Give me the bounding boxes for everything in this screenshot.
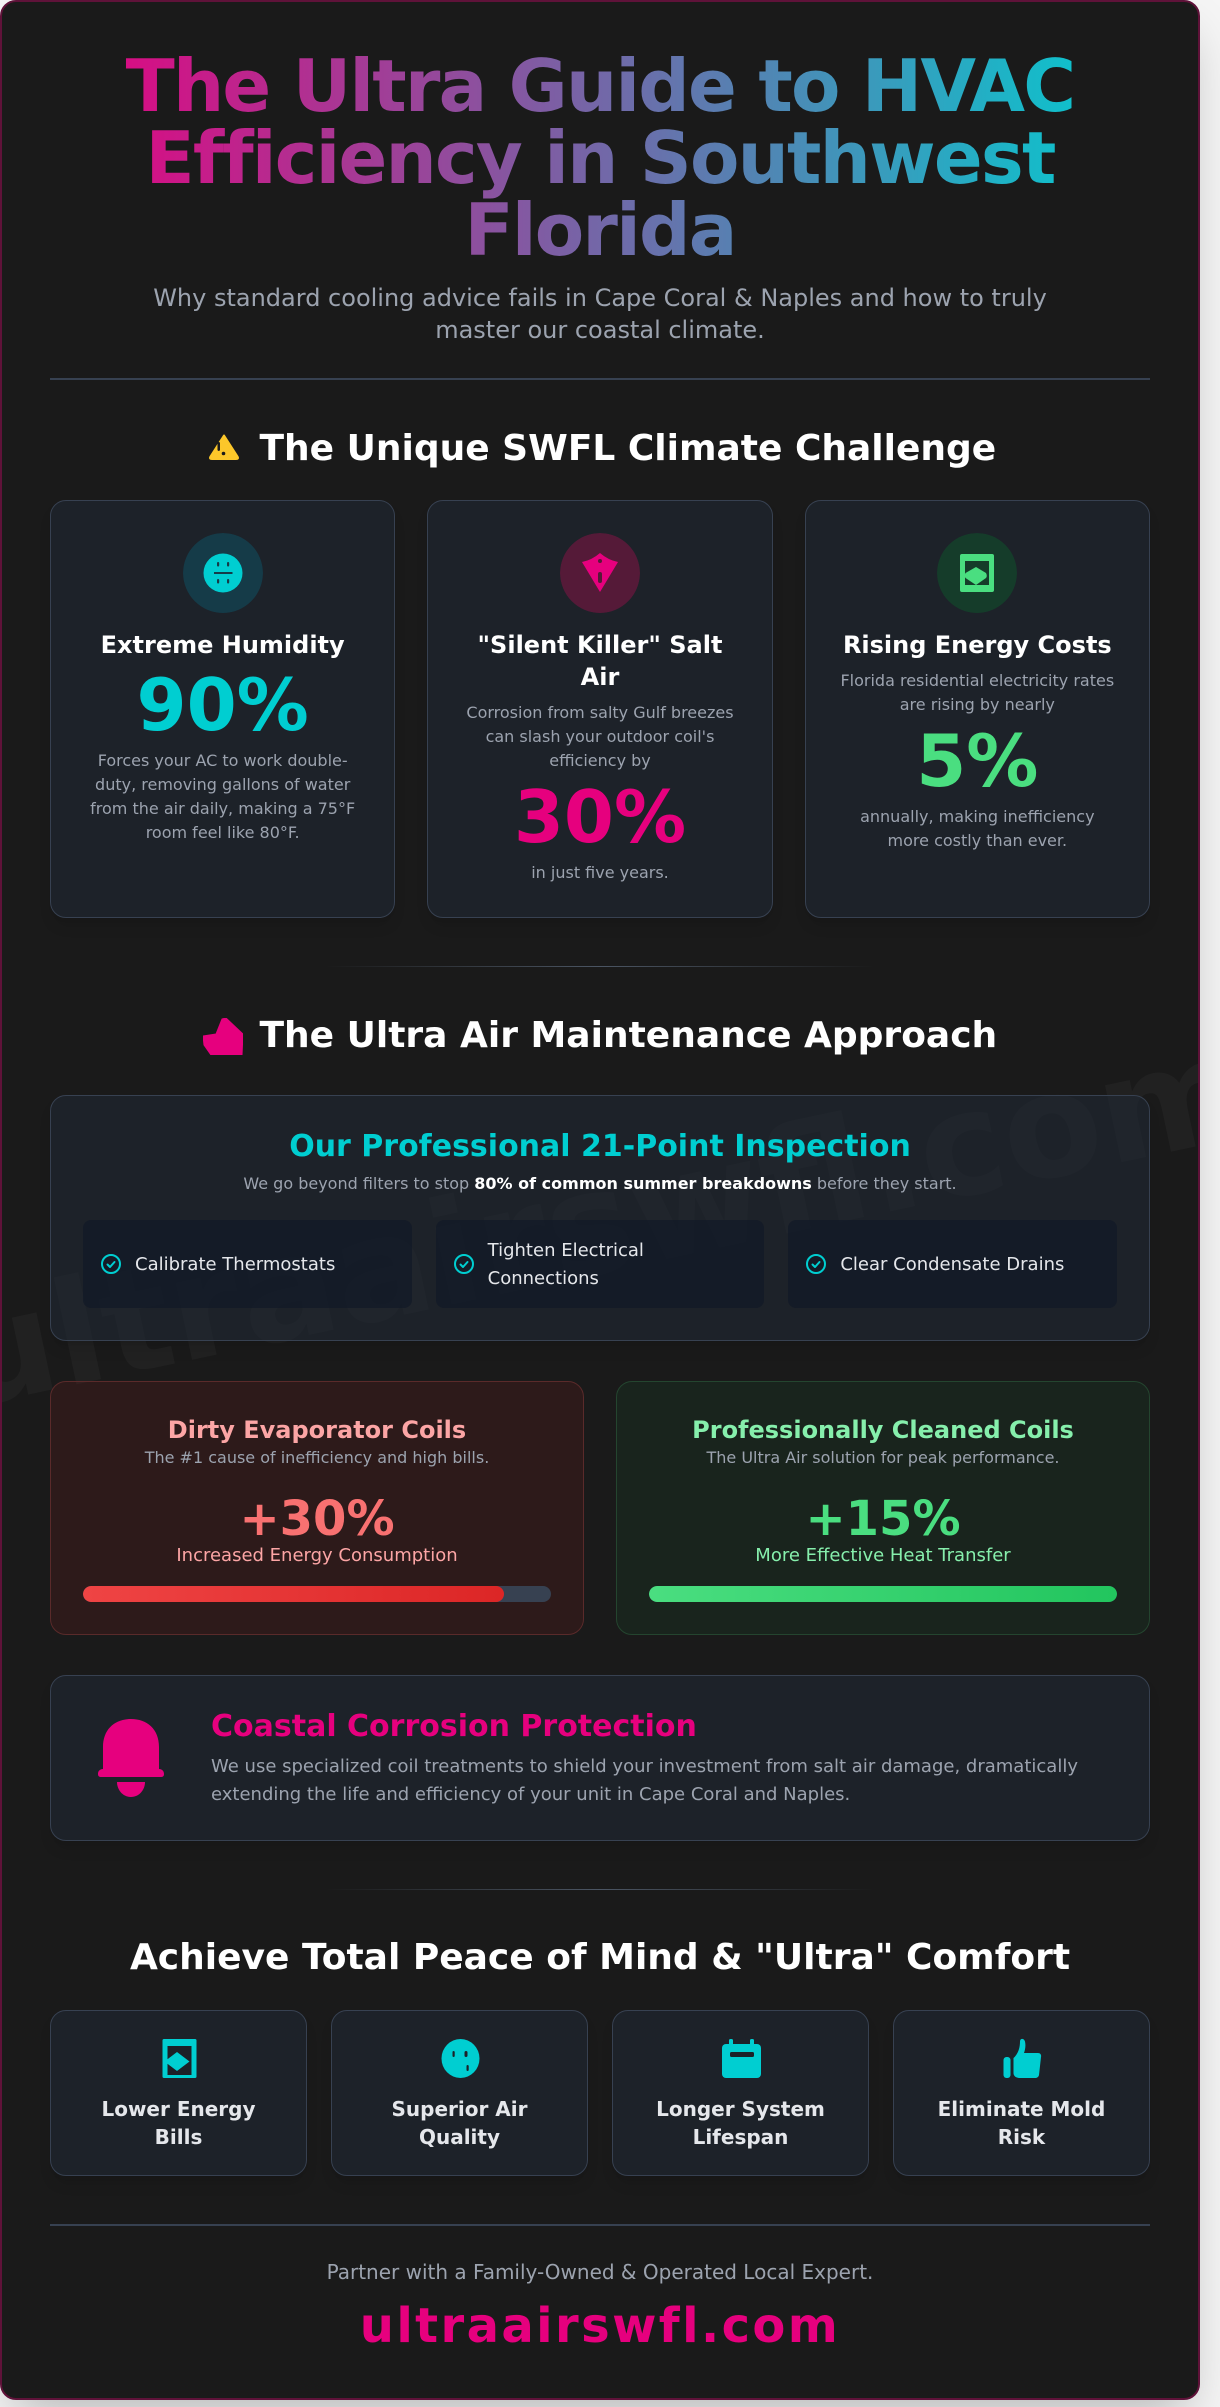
stat: 30%: 30% [514, 775, 686, 859]
text block [211, 1709, 1078, 1805]
label: Longer System Lifespan [656, 2097, 825, 2149]
description: The Ultra Air solution for peak performance. [706, 1448, 1060, 1467]
icon: bell [98, 1719, 164, 1797]
checklist [83, 1220, 1117, 1308]
footer url: ultraairswfl.com [360, 2298, 840, 2354]
stat: +30% [239, 1491, 395, 1547]
description end: in just five years. [531, 863, 669, 882]
item: drains [788, 1220, 1117, 1308]
heading: peace of mind: Achieve Total Peace of Mind & "Ultra" Comfort [130, 1937, 1070, 1978]
description: The #1 cause of inefficiency and high bills. [145, 1448, 489, 1467]
heading: Our Professional 21-Point Inspection [289, 1129, 911, 1164]
progress bar: 90% [83, 1586, 551, 1602]
subtitle [153, 284, 1047, 344]
item: electrical: Tighten Electrical Connections [488, 1240, 644, 1289]
panel: air quality [331, 2010, 588, 2176]
heading: Coastal Corrosion Protection [211, 1709, 697, 1744]
panel: mold risk [893, 2010, 1150, 2176]
icon: calendar [722, 2039, 761, 2078]
label: Superior Air Quality [391, 2097, 528, 2149]
panel: extreme humidity [50, 500, 395, 918]
item: drains: Clear Condensate Drains [840, 1254, 1064, 1275]
subtitle: master our coastal climate. [435, 316, 765, 344]
subtitle: Why standard cooling advice fails in Cape Coral & Naples and how to truly [153, 284, 1047, 312]
icon: face [442, 2039, 480, 2078]
panel: energy costs [805, 500, 1150, 918]
description: Florida residential electricity rates are rising by nearly [840, 671, 1114, 714]
heading: Extreme Humidity [101, 631, 345, 659]
label: Eliminate Mold Risk [938, 2097, 1105, 2149]
icon: thumbs up [1004, 2038, 1042, 2078]
heading: "Silent Killer" Salt Air [478, 631, 722, 691]
stat: +15% [805, 1491, 961, 1547]
item: thermostats [83, 1220, 412, 1308]
description: We go beyond filters to stop 80% of common summer breakdowns before they start. [243, 1174, 957, 1193]
icon: shield [560, 533, 640, 613]
item: thermostats: Calibrate Thermostats [135, 1254, 335, 1275]
label: Lower Energy Bills [101, 2097, 256, 2149]
icon: thumbs up [203, 1018, 243, 1055]
panel: salt air [427, 500, 773, 918]
icon: warning triangle [209, 434, 239, 460]
description: Forces your AC to work double-duty, removing gallons of water from the air daily, making a 75°F room feel like 80°F. [90, 751, 355, 842]
icon: humidity face [183, 533, 263, 613]
panel: system lifespan [612, 2010, 869, 2176]
icon: bill [162, 2039, 196, 2078]
title: The Ultra Guide to HVAC Efficiency in Southwest Florida [126, 44, 1074, 272]
description: Corrosion from salty Gulf breezes can slash your outdoor coil's efficiency by [466, 703, 734, 770]
heading: Professionally Cleaned Coils [692, 1416, 1074, 1444]
progress bar: 100% [649, 1586, 1117, 1602]
description end: annually, making inefficiency more costly than ever. [860, 807, 1095, 850]
panel: cleaned coils [616, 1381, 1150, 1635]
panel: dirty coils [50, 1381, 584, 1635]
heading: Rising Energy Costs [843, 631, 1112, 659]
stat: 90%: 90% [136, 663, 309, 747]
panel: 21-point inspection [50, 1095, 1150, 1341]
item: electrical [436, 1220, 764, 1308]
footer tagline: Partner with a Family-Owned & Operated Local Expert. [327, 2260, 873, 2284]
heading: climate challenge: The Unique SWFL Climate Challenge [260, 428, 996, 469]
heading: Dirty Evaporator Coils [168, 1416, 466, 1444]
stat label: Increased Energy Consumption [176, 1545, 458, 1566]
heading: maintenance approach: The Ultra Air Maintenance Approach [260, 1015, 997, 1056]
stat label: More Effective Heat Transfer [755, 1545, 1011, 1566]
panel: lower energy bills [50, 2010, 307, 2176]
description: We use specialized coil treatments to shield your investment from salt air damage, dramatically extending the life and efficiency of your unit in Cape Coral and Naples. [211, 1756, 1078, 1805]
icon: energy bill [937, 533, 1017, 613]
panel: corrosion protection [50, 1675, 1150, 1841]
stat: 5%: 5% [916, 719, 1038, 803]
